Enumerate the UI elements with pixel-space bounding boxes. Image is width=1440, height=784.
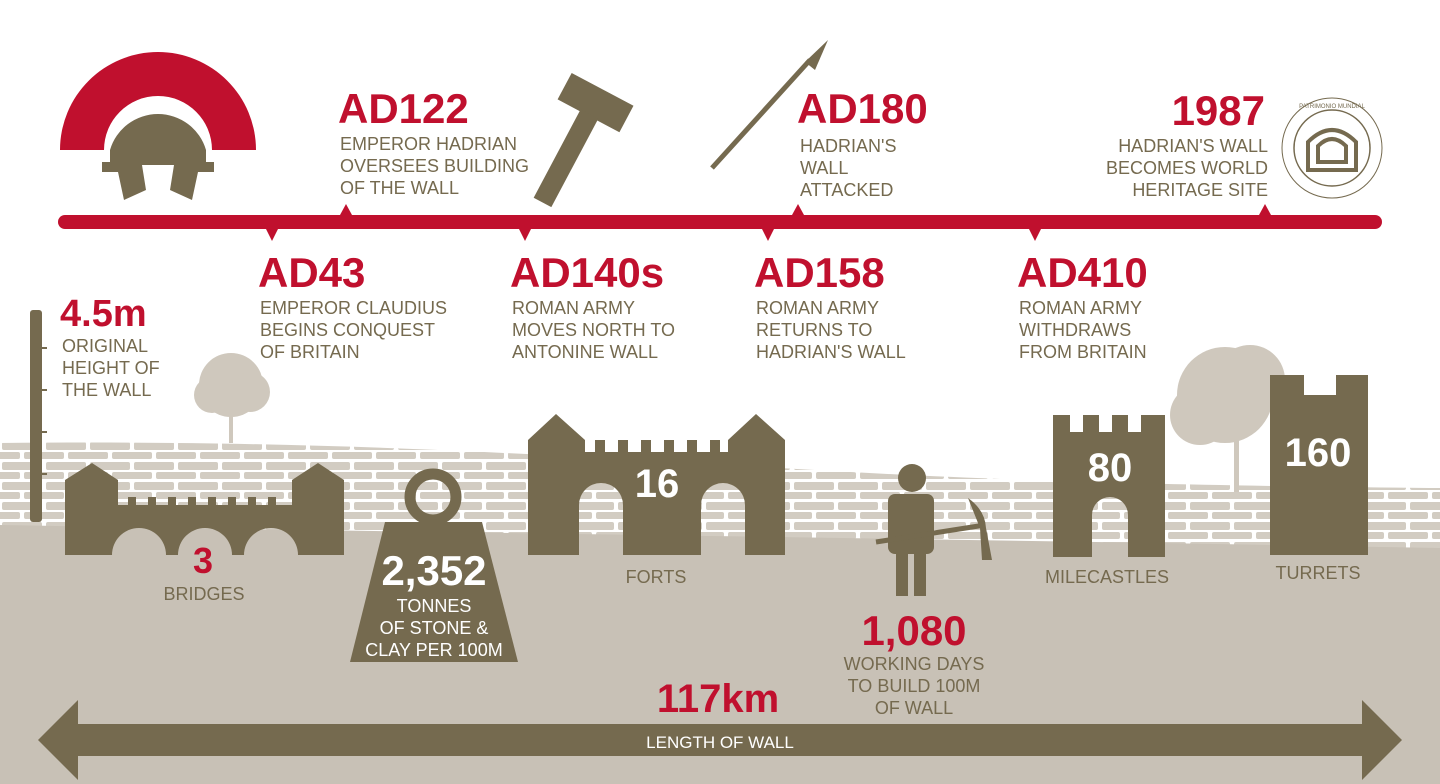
event AD158: AD158 (754, 249, 885, 296)
stat: turrets: 160 (1285, 431, 1351, 475)
event AD122: OF THE WALL (340, 178, 459, 198)
stat: bridges: BRIDGES (163, 584, 245, 604)
event AD158: ROMAN ARMY (756, 298, 879, 318)
stat: length: LENGTH OF WALL (646, 733, 794, 752)
event 1987 (1106, 87, 1268, 200)
event AD180: WALL (800, 158, 848, 178)
timeline bar (58, 204, 1382, 241)
event 1987: BECOMES WORLD (1106, 158, 1268, 178)
stat: height (60, 293, 160, 400)
event AD122: AD122 (338, 85, 469, 132)
event AD43: EMPEROR CLAUDIUS (260, 298, 447, 318)
event AD122 (338, 85, 529, 198)
stat: working days: WORKING DAYS (844, 654, 984, 674)
event 1987: 1987 (1172, 87, 1265, 134)
icon: world heritage emblem: PATRIMONIO MUNDIAL (1299, 104, 1366, 110)
icon: world heritage emblem (1282, 98, 1382, 198)
icon: weight with stat: OF STONE & (380, 618, 488, 638)
stat: working days: 1,080 (861, 607, 967, 654)
stat: milecastles (1045, 446, 1169, 587)
event AD140s: ANTONINE WALL (512, 342, 658, 362)
icon: fort (528, 414, 785, 555)
stat: height: ORIGINAL (62, 336, 148, 356)
icon: worker (876, 464, 992, 596)
event AD180: ATTACKED (800, 180, 893, 200)
stat: length: 117km (657, 677, 779, 721)
event AD122: OVERSEES BUILDING (340, 156, 529, 176)
icon: weight with stat: 2,352 (381, 547, 487, 594)
event AD122: EMPEROR HADRIAN (340, 134, 517, 154)
stat: height: HEIGHT OF (62, 358, 160, 378)
event AD180 (797, 85, 928, 200)
stat: bridges (163, 540, 245, 604)
event AD140s (510, 249, 675, 362)
stat: working days (844, 607, 984, 718)
stat: turrets (1276, 431, 1360, 583)
stat: bridges: 3 (193, 540, 213, 581)
icon: milecastle (1053, 415, 1165, 557)
event AD140s: MOVES NORTH TO (512, 320, 675, 340)
stat: forts (626, 462, 686, 587)
event AD43 (258, 249, 447, 362)
stat: working days: OF WALL (875, 698, 953, 718)
event AD180: HADRIAN'S (800, 136, 896, 156)
event AD410: WITHDRAWS (1019, 320, 1131, 340)
event AD180: AD180 (797, 85, 928, 132)
ground (0, 525, 1440, 784)
event AD158: RETURNS TO (756, 320, 872, 340)
event 1987: HERITAGE SITE (1132, 180, 1268, 200)
icon: weight with stat: CLAY PER 100M (365, 640, 503, 660)
icon: weight with stat (350, 474, 518, 662)
icon: roman helmet (60, 52, 256, 200)
arrow: length (38, 700, 1402, 780)
stat: forts: FORTS (626, 567, 686, 587)
event AD410: FROM BRITAIN (1019, 342, 1147, 362)
icon: bridge (65, 463, 344, 555)
stat: turrets: TURRETS (1276, 563, 1360, 583)
event AD410 (1017, 249, 1148, 362)
stat: height: 4.5m (60, 293, 147, 335)
icon: weight with stat: TONNES (397, 596, 471, 616)
event AD410: ROMAN ARMY (1019, 298, 1142, 318)
stat: length (646, 677, 794, 752)
icon: spear (712, 40, 828, 168)
event AD158: HADRIAN'S WALL (756, 342, 906, 362)
event AD43: OF BRITAIN (260, 342, 360, 362)
brick wall band (0, 443, 1440, 550)
height ruler (30, 310, 47, 522)
event AD140s: ROMAN ARMY (512, 298, 635, 318)
stat: height: THE WALL (62, 380, 151, 400)
stat: milecastles: MILECASTLES (1045, 567, 1169, 587)
event AD410: AD410 (1017, 249, 1148, 296)
icon: turret (1270, 375, 1368, 555)
event AD43: AD43 (258, 249, 365, 296)
icon: hammer (512, 73, 633, 219)
event AD158 (754, 249, 906, 362)
tree right (1170, 345, 1285, 492)
tree left (194, 353, 270, 443)
event AD140s: AD140s (510, 249, 664, 296)
stat: working days: TO BUILD 100M (848, 676, 980, 696)
stat: milecastles: 80 (1088, 446, 1132, 490)
event AD43: BEGINS CONQUEST (260, 320, 435, 340)
event 1987: HADRIAN'S WALL (1118, 136, 1268, 156)
stat: forts: 16 (635, 462, 679, 506)
